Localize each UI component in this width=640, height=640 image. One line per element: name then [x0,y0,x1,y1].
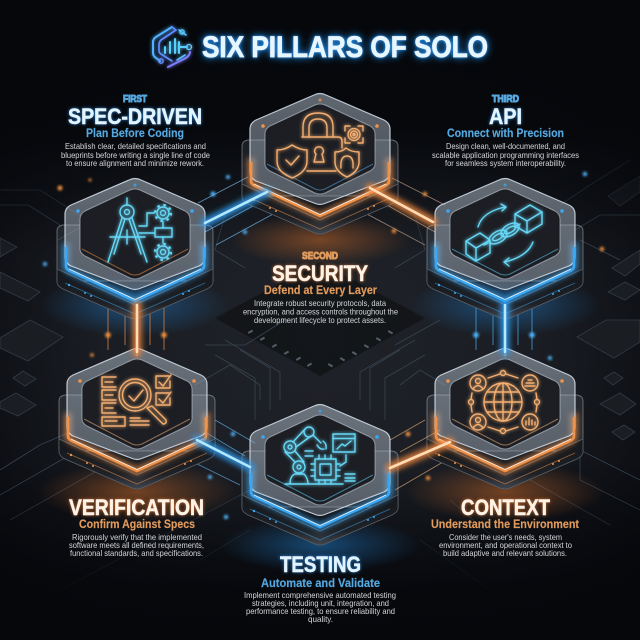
text block: spec-driven: Plan Before Coding [86,126,184,140]
title text: SIX PILLARS OF SOLO [202,31,488,64]
icon: globe and network [468,370,540,434]
text block: security: SECURITY [272,261,368,286]
text block: security: development lifecycle to protect assets. [254,315,386,325]
hexagon: context [427,348,583,489]
text block: spec-driven: FIRST [123,94,147,105]
text block: context: build adaptive and relevant solutions. [443,548,567,558]
text block: api: scalable application programming interfaces [432,150,579,160]
text block: api: THIRD [492,94,519,105]
text block: verification: VERIFICATION [69,495,204,520]
text block: context: environment, and operational context to [439,540,572,550]
text block: context: CONTEXT [461,495,550,520]
glowing dots [43,172,604,519]
text block: context: Understand the Environment [431,517,579,531]
text block: testing [244,552,396,624]
hexagon: verification [59,348,215,489]
text block: verification: functional standards, and specifications. [70,548,203,558]
icon: chain and cubes [466,204,542,266]
glow halos [37,214,605,573]
text block: testing: performance testing, to ensure reliability and [246,606,395,616]
text block: testing: Implement comprehensive automated testing [244,590,396,600]
connector lines: thin parallel traces [108,177,532,490]
hexagon: spec-driven [57,178,213,319]
connector beams [137,188,505,468]
text block: spec-driven: SPEC-DRIVEN [68,104,202,129]
text block: spec-driven: Establish clear, detailed specifications and [65,141,206,151]
text block: spec-driven: to ensure alignment and minimize rework. [66,158,204,168]
text block: api: Connect with Precision [447,126,564,140]
text block: api: for seamless system interoperability. [445,158,566,168]
text block: context [431,495,579,558]
text block: verification: Confirm Against Specs [79,517,195,531]
text block: security [243,251,398,325]
text block: testing: quality. [308,614,333,624]
icon: title logo [153,27,192,67]
text block: testing: strategies, including unit, integration, and [252,598,389,608]
text block: api [432,94,579,168]
text block: spec-driven [61,94,210,168]
text block: api: Design clean, well-documented, and [446,141,565,151]
text block: spec-driven: blueprints before writing a single line of code [61,150,210,160]
text block: security: SECOND [302,251,338,262]
hexagon: testing [242,404,398,545]
text block: verification: software meets all defined requirements, [69,540,204,550]
text block: testing: Automate and Validate [261,576,380,590]
text block: security: Integrate robust security protocols, data [254,298,386,308]
text block: context: Consider the user's needs, system [449,532,562,542]
text block: verification [69,495,204,558]
icon: padlock and shields [277,113,363,178]
text block: security: Defend at Every Layer [264,283,377,297]
text block: verification: Rigorously verify that the implemented [72,532,202,542]
text block: security: encryption, and access controls throughout the [243,306,398,316]
icon: robot arm, chip and chart [284,427,355,484]
icon: compass and flow chart [108,198,172,262]
title [153,27,488,67]
text block: api: API [489,104,522,129]
hexagon: security [242,94,398,234]
hexagon: api [427,178,583,319]
text block: testing: TESTING [280,552,361,577]
icon: checklist and magnifier [102,375,171,426]
